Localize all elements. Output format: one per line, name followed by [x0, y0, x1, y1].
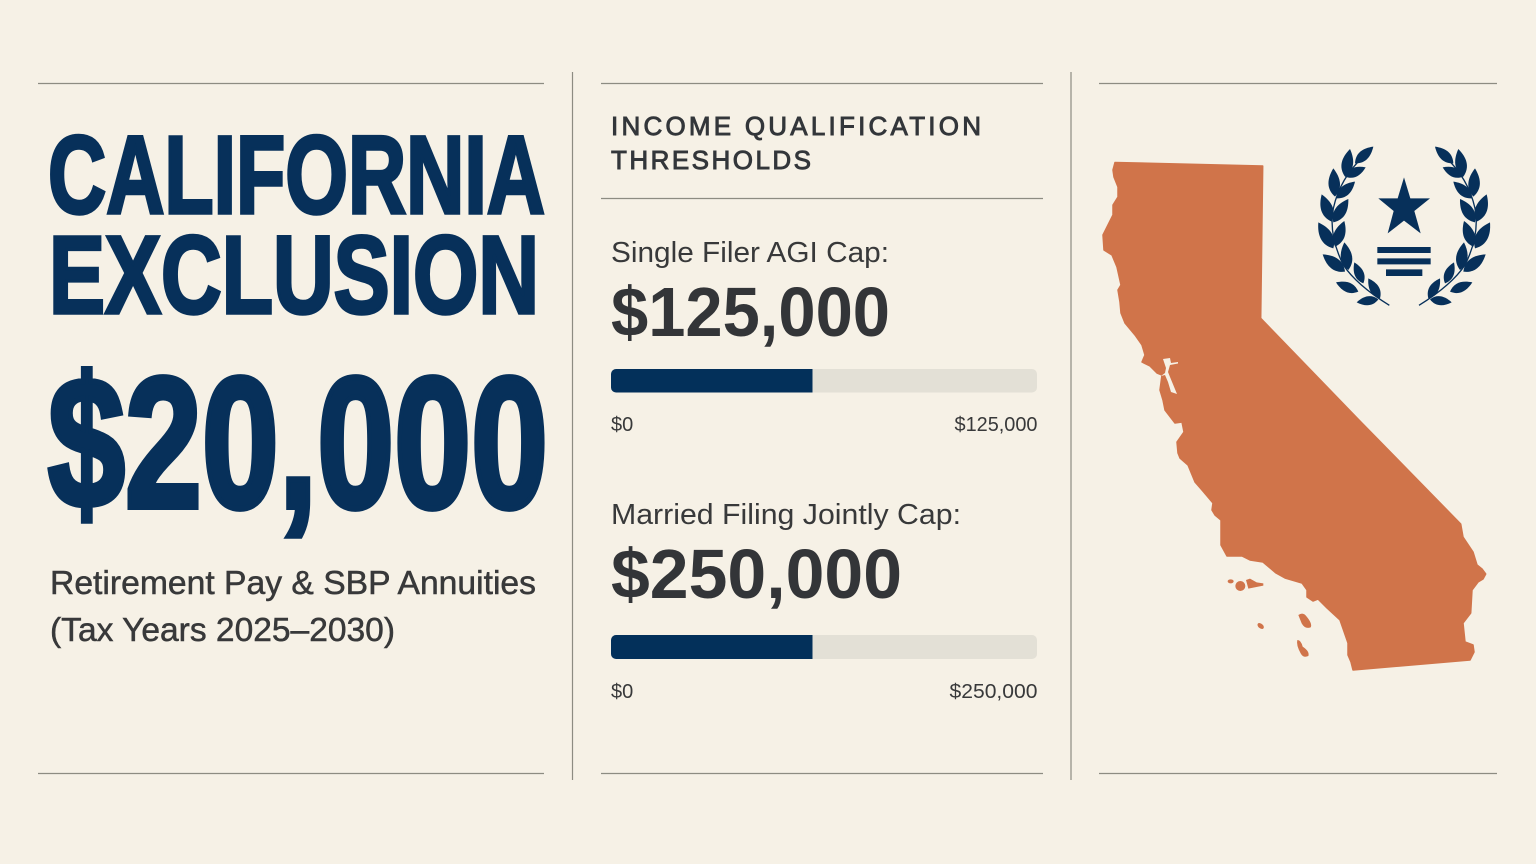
single filer scale: $0 — [611, 414, 633, 436]
state silhouette — [1103, 162, 1486, 670]
panel: income thresholds — [611, 111, 1038, 703]
section heading: INCOME QUALIFICATION — [611, 111, 981, 141]
single filer label: Single Filer AGI Cap: — [611, 237, 889, 269]
left laurel branch — [1313, 143, 1389, 307]
single filer scale — [611, 414, 1038, 436]
exclusion amount: $20,000 — [48, 340, 548, 547]
subtitle: Retirement Pay & SBP Annuities — [50, 565, 536, 602]
joint filer label: Married Filing Jointly Cap: — [611, 499, 961, 531]
Channel Islands — [1228, 579, 1311, 657]
title — [48, 114, 545, 337]
title: EXCLUSION — [49, 214, 539, 337]
right laurel branch — [1419, 143, 1495, 307]
single filer bar — [611, 369, 1037, 392]
section heading: THRESHOLDS — [611, 145, 811, 175]
panel: headline — [48, 114, 548, 649]
joint filer scale — [611, 681, 1038, 703]
joint filer bar — [611, 635, 1037, 659]
section heading — [611, 111, 981, 175]
title: CALIFORNIA — [48, 114, 545, 237]
San Francisco Bay — [1161, 358, 1178, 394]
icon: laurel wreath emblem — [1313, 143, 1495, 307]
subtitle: (Tax Years 2025–2030) — [50, 612, 395, 649]
joint filer block — [611, 499, 1038, 703]
map: California — [1103, 162, 1486, 670]
single filer amount: $125,000 — [611, 273, 890, 351]
single filer scale: $125,000 — [954, 414, 1038, 436]
stripes — [1377, 247, 1431, 276]
star — [1378, 177, 1430, 233]
joint filer scale: $250,000 — [950, 681, 1038, 703]
subtitle — [50, 565, 536, 649]
single filer block — [611, 237, 1038, 436]
joint filer amount: $250,000 — [611, 535, 902, 613]
joint filer scale: $0 — [611, 681, 633, 703]
